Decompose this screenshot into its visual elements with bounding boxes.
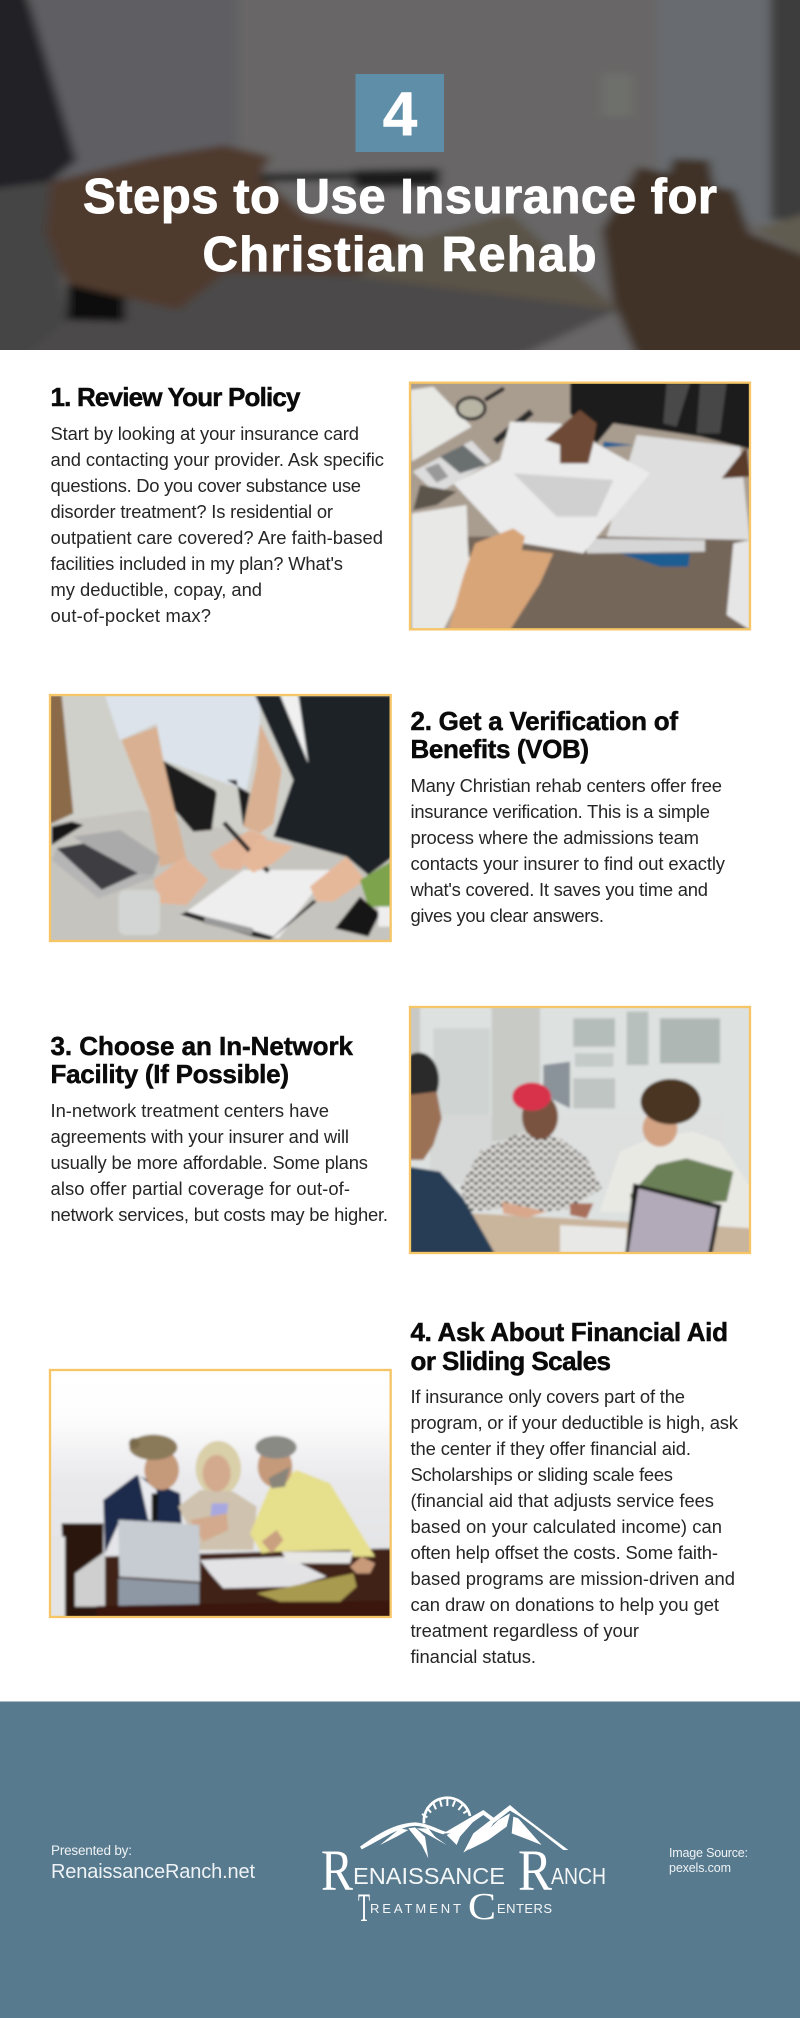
text block: step 4 body: can draw on donations to help you get [410, 1594, 719, 1615]
text block: step 4 body: treatment regardless of your [410, 1620, 639, 1641]
text block: step 2 body: contacts your insurer to find out exactly [410, 853, 726, 874]
panel: hero header [0, 0, 800, 360]
logo wordmark: ENAISSANCE [353, 1863, 505, 1889]
logo wordmark: R [321, 1838, 353, 1903]
photo: colleagues signing clipboard [47, 690, 393, 947]
heading: step 4 [410, 1317, 728, 1376]
text block: step 4 body: the center if they offer financial aid. [410, 1438, 691, 1459]
title [83, 170, 717, 282]
logo wordmark: R [518, 1838, 552, 1903]
heading: step 4: 4. Ask About Financial Aid [410, 1317, 728, 1347]
text block: step 3 body: usually be more affordable. Some plans [50, 1152, 368, 1173]
text block: presented by [51, 1843, 255, 1883]
title: Christian Rehab [202, 228, 596, 282]
panel: footer [0, 1702, 800, 2018]
heading: step 3 [50, 1031, 354, 1089]
logo wordmark: ENTERS [497, 1901, 552, 1916]
panel: step 1 text [50, 382, 384, 626]
number badge [356, 74, 444, 152]
text block: step 3 body: also offer partial coverage for out-of- [50, 1178, 350, 1199]
text block: step 4 body: program, or if your deductible is high, ask [410, 1412, 739, 1433]
text block: step 1 body: outpatient care covered? Are faith-based [50, 527, 383, 548]
logo: Renaissance Ranch Treatment Centers [321, 1798, 606, 1930]
text block: image source [669, 1846, 748, 1875]
text block: step 4 body: financial status. [410, 1646, 536, 1667]
text block: step 2 body: Many Christian rehab centers offer free [410, 775, 722, 796]
text block: step 2 body [410, 775, 726, 926]
text block: step 1 body: disorder treatment? Is residential or [50, 501, 333, 522]
text block: presented by: Presented by: [51, 1843, 132, 1858]
photo: exchanging insurance documents [407, 380, 753, 633]
panel: step 3 text [50, 1031, 388, 1225]
hero background photo [0, 0, 800, 360]
text block: image source: Image Source: [669, 1846, 748, 1860]
text block: step 4 body: often help offset the costs. Some faith- [410, 1542, 718, 1563]
text block: step 3 body: agreements with your insurer and will [50, 1126, 349, 1147]
text block: step 3 body [50, 1100, 388, 1225]
text block: step 4 body [410, 1386, 739, 1667]
text block: step 1 body: out-of-pocket max? [50, 605, 211, 626]
text block: step 2 body: insurance verification. This is a simple [410, 801, 710, 822]
logo wordmark: REATMENT [370, 1901, 461, 1916]
heading: step 3: 3. Choose an In-Network [50, 1031, 354, 1061]
text block: step 3 body: network services, but costs may be higher. [50, 1204, 388, 1225]
logo wordmark [321, 1838, 606, 1930]
text block: step 4 body: based on your calculated income) can [410, 1516, 722, 1537]
text block: step 1 body [50, 423, 384, 626]
text block: step 1 body: my deductible, copay, and [50, 579, 262, 600]
panel: step 4 text [410, 1317, 739, 1667]
title: Steps to Use Insurance for [83, 170, 717, 224]
number badge: 4 [383, 80, 418, 149]
text block: image source: pexels.com [669, 1861, 731, 1875]
heading: step 4: or Sliding Scales [410, 1346, 611, 1376]
text block: step 1 body: facilities included in my plan? What's [50, 553, 343, 574]
logo wordmark: T [358, 1885, 370, 1930]
icon: sun and mountains [360, 1798, 568, 1858]
heading: step 3: Facility (If Possible) [50, 1059, 289, 1089]
text block: presented by: RenaissanceRanch.net [51, 1861, 255, 1883]
photo: couple with advisor [47, 1367, 393, 1620]
text block: step 3 body: In-network treatment centers have [50, 1100, 329, 1121]
heading: step 1: 1. Review Your Policy [50, 382, 301, 412]
heading: step 2: Benefits (VOB) [410, 734, 589, 764]
photo: team meeting at table [398, 1003, 753, 1257]
text block: step 1 body: Start by looking at your insurance card [50, 423, 359, 444]
text block: step 4 body: If insurance only covers part of the [410, 1386, 685, 1407]
text block: step 1 body: and contacting your provider. Ask specific [50, 449, 384, 470]
logo wordmark: ANCH [551, 1863, 606, 1889]
heading: step 2: 2. Get a Verification of [410, 706, 678, 736]
logo wordmark: C [468, 1886, 496, 1928]
text block: step 4 body: (financial aid that adjusts service fees [410, 1490, 714, 1511]
heading: step 2 [410, 706, 678, 764]
text block: step 2 body: what's covered. It saves you time and [410, 879, 708, 900]
text block: step 1 body: questions. Do you cover substance use [50, 475, 361, 496]
text block: step 4 body: based programs are mission-driven and [410, 1568, 735, 1589]
text block: step 4 body: Scholarships or sliding scale fees [410, 1464, 673, 1485]
text block: step 2 body: process where the admissions team [410, 827, 699, 848]
text block: step 2 body: gives you clear answers. [410, 905, 604, 926]
panel: step 2 text [410, 706, 726, 926]
